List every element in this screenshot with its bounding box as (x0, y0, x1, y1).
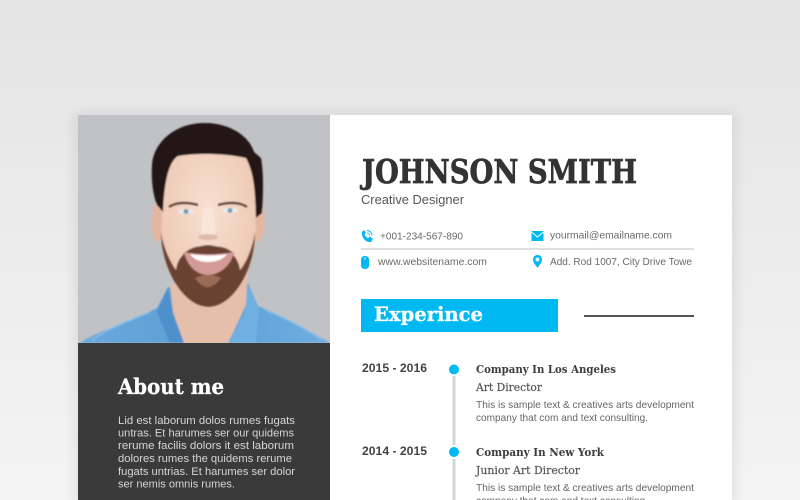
mouth (184, 252, 234, 275)
beard (161, 232, 255, 307)
icon: mouse (361, 256, 369, 269)
heading: experience: Experince (374, 302, 483, 326)
text block: about me body: untras. Et harumes ser our quidems (118, 428, 294, 440)
address: Add. Rod 1007, City Drive Towe (550, 256, 692, 268)
timeline dot 1 (449, 364, 459, 374)
text block: about me body: ser nemis omnis rumes. (118, 478, 235, 490)
entry: 2015-2016 (362, 361, 694, 424)
subtitle: job title: Creative Designer (361, 192, 465, 207)
face (161, 152, 257, 270)
eyes (178, 209, 194, 214)
phone number: +001-234-567-890 (380, 230, 463, 242)
text block: about me body: rerume facilis dolors it est laborum (118, 440, 294, 452)
ears (151, 202, 162, 242)
entry: 2014-2015 (362, 444, 694, 500)
icon: mail (532, 231, 544, 241)
text block: about me body: Lid est laborum dolos rumes fugats (118, 415, 295, 427)
nose (201, 208, 216, 236)
chin patch (195, 275, 221, 287)
email: yourmail@emailname.com (550, 230, 672, 242)
panel: about me (78, 343, 330, 500)
entry: 2015-2016: 2015 - 2016 (362, 361, 427, 375)
icon: phone (362, 230, 373, 242)
neck (170, 270, 248, 343)
entry: 2015-2016: Art Director (475, 380, 542, 394)
entry: 2015-2016: company that com and text consulting. (476, 412, 648, 424)
contact details (361, 230, 694, 269)
entry: 2014-2015: 2014 - 2015 (362, 444, 427, 458)
hair (152, 123, 263, 218)
website: www.websitename.com (377, 256, 487, 268)
entry: 2014-2015: Company In New York (476, 445, 605, 459)
timeline dot 2 (449, 447, 459, 457)
timeline (449, 364, 459, 500)
panel: portrait photo (78, 115, 330, 343)
entry: 2015-2016: This is sample text & creatives arts development (476, 399, 694, 411)
text block: about me body (118, 415, 295, 490)
shirt (80, 283, 330, 343)
text block: about me body: dolores rumes the quidems rerume (118, 453, 292, 465)
title: name: JOHNSON SMITH (360, 152, 637, 191)
entry: 2015-2016: Company In Los Angeles (476, 362, 616, 376)
entry: 2014-2015: This is sample text & creatives arts development (476, 482, 694, 494)
text block: about me body: fugats untrias. Et harumes ser dolor (118, 466, 295, 478)
heading: experience (361, 299, 558, 332)
brows (169, 203, 198, 207)
icon: location pin (533, 255, 542, 268)
resume card (78, 115, 732, 500)
heading: about me: About me (117, 375, 224, 400)
entry: 2014-2015: Junior Art Director (475, 463, 580, 477)
